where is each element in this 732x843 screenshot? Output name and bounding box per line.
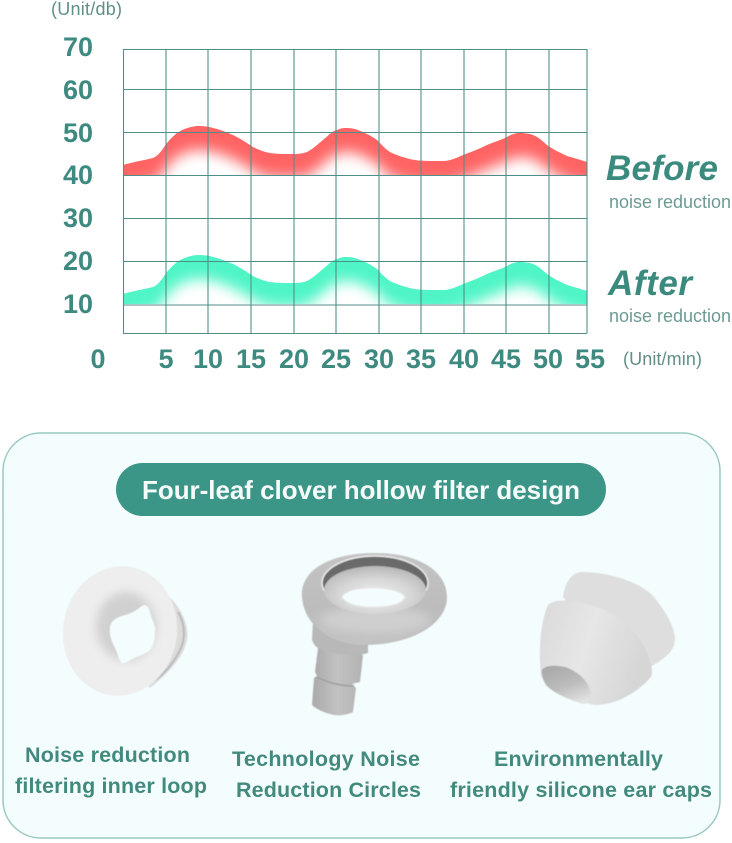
- x axis labels: 0: [90, 344, 106, 374]
- chart: noise level before and after: [123, 49, 587, 334]
- label: ear caps: Environmentally: [494, 747, 663, 771]
- ring groove: [322, 556, 428, 610]
- grid: [123, 49, 587, 334]
- stem notch shading: [317, 677, 354, 686]
- label: inner loop: filtering inner loop: [15, 774, 207, 798]
- y axis labels: 70: [63, 32, 93, 62]
- heading pill: [116, 463, 606, 516]
- x axis labels: 20: [279, 344, 309, 374]
- y axis labels: 60: [63, 75, 93, 105]
- x axis labels: [90, 344, 605, 374]
- green after curve: [124, 255, 586, 304]
- heading pill: Four-leaf clover hollow filter design: [142, 475, 580, 505]
- label: reduction circles: Technology Noise: [232, 747, 420, 771]
- icon: silicone ear cap: [540, 572, 675, 705]
- cap opening: [542, 666, 591, 704]
- label: ear caps: friendly silicone ear caps: [450, 778, 712, 802]
- label: reduction circles: [232, 747, 421, 802]
- neck: [312, 620, 368, 655]
- legend: before: [606, 149, 731, 212]
- x axis unit: (Unit/min): [623, 349, 702, 369]
- clover hole: [110, 605, 155, 663]
- legend: before: Before: [606, 149, 718, 188]
- y axis labels: 20: [63, 246, 93, 276]
- icon: noise reduction circle: [302, 553, 447, 715]
- label: ear caps: [450, 747, 712, 802]
- icon: filtering inner loop: [63, 566, 188, 696]
- y axis labels: [63, 32, 93, 319]
- x axis labels: 40: [449, 344, 479, 374]
- x axis labels: 25: [321, 344, 351, 374]
- legend: after: [607, 264, 731, 326]
- ring body: [302, 553, 447, 645]
- stem: [312, 648, 363, 715]
- x axis labels: 15: [236, 344, 266, 374]
- x axis labels: 10: [193, 344, 223, 374]
- legend: before: noise reduction: [609, 192, 731, 212]
- y axis labels: 40: [63, 160, 93, 190]
- y axis labels: 50: [63, 118, 93, 148]
- x axis labels: 5: [158, 344, 174, 374]
- y axis labels: 10: [63, 289, 93, 319]
- x axis labels: 30: [364, 344, 394, 374]
- red before curve: [124, 126, 586, 175]
- y axis labels: 30: [63, 203, 93, 233]
- x axis labels: 50: [533, 344, 563, 374]
- ring hole: [342, 588, 405, 607]
- x axis labels: 45: [491, 344, 521, 374]
- label: reduction circles: Reduction Circles: [236, 778, 421, 802]
- x axis labels: 55: [575, 344, 605, 374]
- ring bowl: [324, 566, 426, 614]
- label: inner loop: Noise reduction: [25, 743, 190, 767]
- legend: after: noise reduction: [609, 306, 731, 326]
- label: inner loop: [15, 743, 207, 798]
- legend: after: After: [607, 264, 694, 303]
- x axis labels: 35: [406, 344, 436, 374]
- panel: filter design: [3, 433, 720, 838]
